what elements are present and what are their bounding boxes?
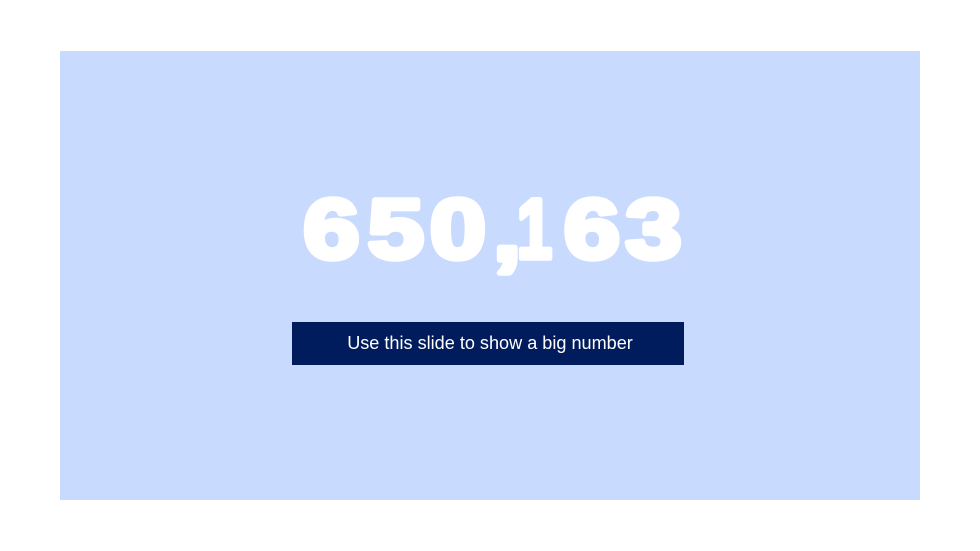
big number bbox=[303, 182, 682, 278]
big number: 650 bbox=[303, 182, 486, 276]
big number: 1 bbox=[517, 182, 552, 276]
caption bar bbox=[292, 322, 684, 365]
caption bar: Use this slide to show a big number bbox=[347, 333, 633, 353]
big number: , bbox=[493, 184, 521, 278]
panel: background bbox=[60, 51, 920, 500]
big number: 63 bbox=[564, 182, 682, 276]
